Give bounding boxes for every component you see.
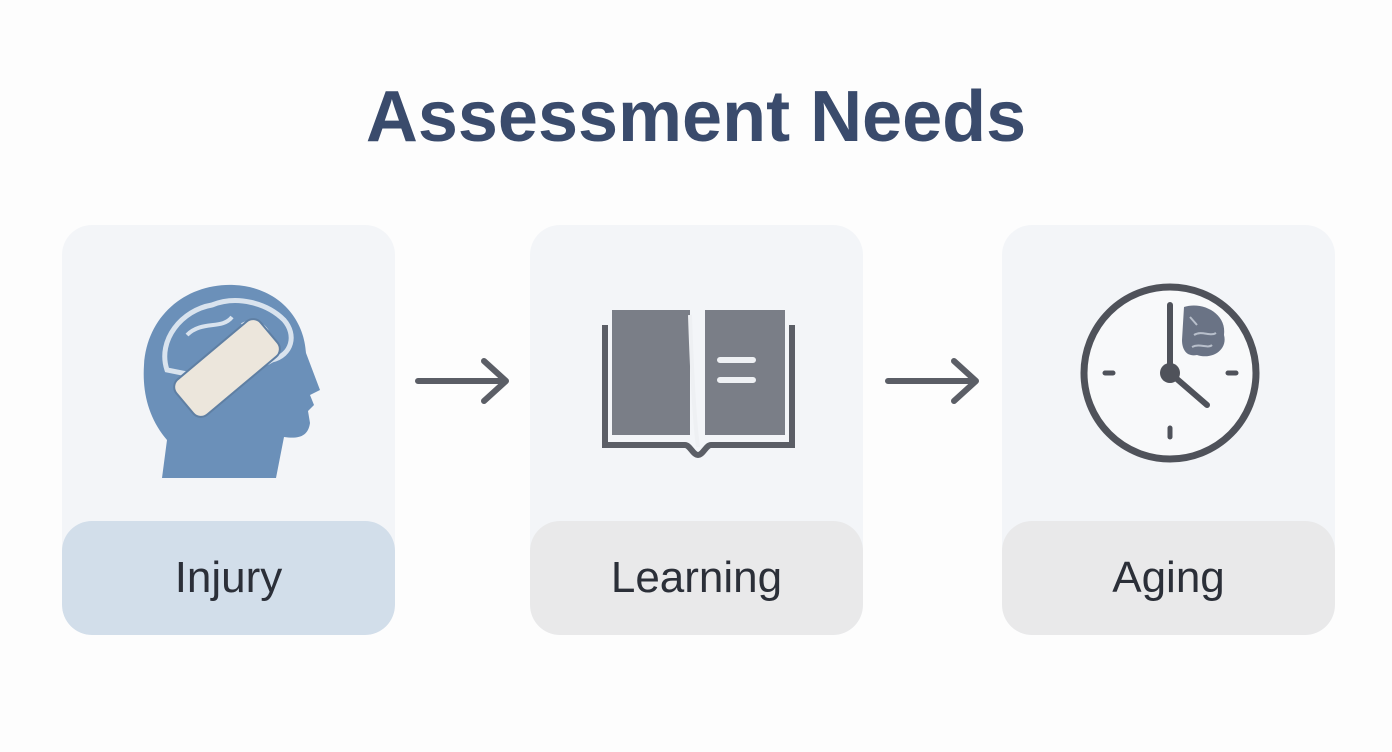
icon: book <box>602 310 795 458</box>
icon: head with bandage <box>144 284 320 478</box>
label: Aging: Aging <box>1112 553 1225 602</box>
label: Learning: Learning <box>611 553 782 602</box>
label: Aging <box>1002 521 1335 635</box>
label: Injury: Injury <box>175 553 282 602</box>
arrow 1 <box>415 358 509 404</box>
arrow 2 <box>885 358 979 404</box>
panel: injury <box>62 225 395 635</box>
label: Learning <box>530 521 863 635</box>
panel: learning <box>530 225 863 635</box>
title: Assessment Needs <box>366 77 1026 157</box>
label: Injury <box>62 521 395 635</box>
icon: clock with brain <box>1080 284 1260 462</box>
panel: aging <box>1002 225 1335 635</box>
